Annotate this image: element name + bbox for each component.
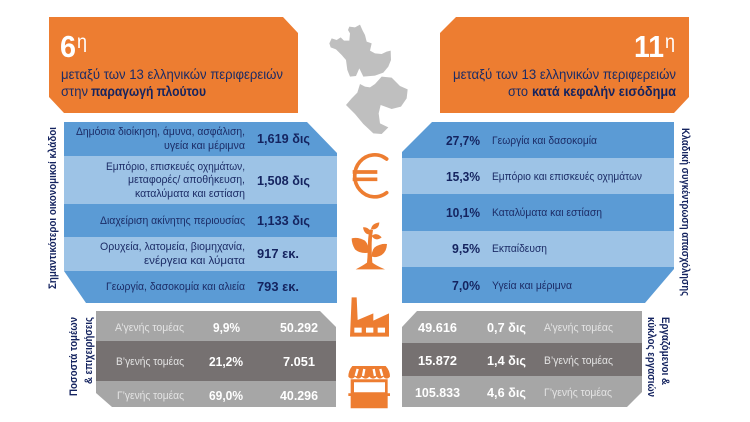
panel: wealth production rank (49, 17, 298, 113)
row: primary sector: 0,7 δις (487, 320, 526, 335)
row: education share: Εκπαίδευση (492, 243, 547, 255)
label: employees and turnover (645, 317, 671, 397)
row: tertiary sector (117, 388, 318, 403)
description emphasis: κατά κεφαλήν εισόδημα (532, 84, 677, 99)
row: accommodation share: Καταλύματα και εστίαση (492, 207, 602, 219)
row: primary sector (418, 320, 613, 335)
row: primary sector: 9,9% (213, 320, 240, 335)
icon: euro (353, 155, 387, 197)
row: health share: 7,0% (452, 278, 480, 293)
rank suffix: η (77, 32, 87, 53)
row: secondary sector: 7.051 (283, 354, 315, 369)
map: region silhouette (329, 25, 408, 134)
row: tertiary sector: 4,6 δις (487, 385, 526, 400)
row: education share: 9,5% (452, 241, 480, 256)
row: trade and transport (106, 161, 310, 200)
label: main economic sectors: Σημαντικότεροι οικονομικοί κλάδοι (47, 127, 59, 289)
row: agriculture (106, 279, 299, 294)
row: trade share: Εμπόριο και επισκευές οχημάτων (492, 171, 642, 183)
row: trade and transport: καταλύματα και εστίαση (135, 188, 245, 200)
row: agriculture: 793 εκ. (257, 279, 299, 294)
label: employees and turnover: κύκλος εργασιών (645, 317, 657, 397)
row: tertiary sector: 69,0% (209, 388, 243, 403)
icon: factory (350, 297, 389, 337)
row: real estate (100, 213, 310, 228)
row: tertiary sector: 40.296 (280, 388, 318, 403)
row: primary sector: 50.292 (280, 320, 318, 335)
row: tertiary sector: Γ’γενής τομέας (117, 390, 184, 402)
description emphasis: παραγωγή πλούτου (91, 84, 206, 99)
row: secondary sector (418, 353, 613, 368)
description line 1: μεταξύ των 13 ελληνικών περιφερειών (61, 67, 283, 82)
row: secondary sector (116, 354, 315, 369)
row: primary sector: Α’γενής τομέας (544, 322, 613, 334)
row: accommodation share: 10,1% (446, 205, 480, 220)
label: employment concentration: Κλαδική συγκέντρωση απασχόλησης (679, 128, 691, 296)
row: primary sector (115, 320, 318, 335)
panel: sector and business shares table (96, 311, 336, 407)
panel: main economic sectors table (64, 122, 337, 303)
row: public administration (76, 126, 310, 152)
row: education share (452, 241, 547, 256)
row: trade and transport: Εμπόριο, επισκευές οχημάτων, (106, 161, 245, 173)
row: public administration: Δημόσια διοίκηση, άμυνα, ασφάλιση, (76, 126, 245, 138)
panel: employees and turnover table (402, 311, 642, 407)
row: agriculture share (446, 133, 598, 148)
row: secondary sector: 1,4 δις (487, 353, 526, 368)
row: health share: Υγεία και μέριμνα (492, 280, 573, 292)
row: mining and industry: 917 εκ. (257, 246, 299, 261)
rank suffix: η (665, 32, 675, 53)
row: agriculture: Γεωργία, δασοκομία και αλιεία (106, 281, 246, 293)
row: tertiary sector: Γ’γενής τομέας (544, 387, 612, 399)
description line 1: μεταξύ των 13 ελληνικών περιφερειών (453, 67, 676, 82)
label: sector and business shares: & επιχειρήσεις (83, 317, 95, 384)
row: mining and industry (100, 241, 299, 267)
row: mining and industry: Ορυχεία, λατομεία, βιομηχανία, (100, 241, 245, 253)
description line 2: στην (61, 84, 88, 99)
row: tertiary sector (415, 385, 612, 400)
label: employees and turnover: Εργαζόμενοι & (659, 317, 671, 385)
row: agriculture share: Γεωργία και δασοκομία (492, 135, 598, 147)
row: accommodation share (446, 205, 602, 220)
row: mining and industry: ενέργεια και λύματα (144, 255, 246, 267)
icon: plant sprout (352, 222, 387, 269)
row: trade share: 15,3% (446, 169, 480, 184)
row: public administration: υγεία και μέριμνα (164, 140, 246, 152)
row: agriculture share: 27,7% (446, 133, 480, 148)
row: trade and transport: 1,508 δις (257, 173, 310, 188)
row: trade and transport: μεταφορές/ αποθήκευση, (128, 174, 245, 186)
row: real estate: 1,133 δις (257, 213, 310, 228)
label: sector and business shares: Ποσοστά τομέων (68, 317, 80, 396)
row: real estate: Διαχείριση ακίνητης περιουσίας (100, 215, 245, 227)
panel: per-capita income rank (440, 17, 689, 113)
description line 2: στο (508, 84, 528, 99)
row: tertiary sector: 105.833 (415, 385, 460, 400)
rank number 11th: 11 (634, 29, 664, 64)
label: sector and business shares (68, 317, 95, 396)
row: secondary sector: Β’γενής τομέας (544, 355, 613, 367)
row: health share (452, 278, 573, 293)
row: primary sector: 49.616 (418, 320, 457, 335)
row: secondary sector: 21,2% (209, 354, 243, 369)
icon: market stall (348, 366, 390, 408)
row: secondary sector: Β’γενής τομέας (116, 356, 184, 368)
row: primary sector: Α’γενής τομέας (115, 322, 184, 334)
row: public administration: 1,619 δις (257, 131, 310, 146)
panel: employment concentration table (402, 122, 674, 303)
rank number 6th: 6 (60, 29, 76, 64)
row: secondary sector: 15.872 (418, 353, 457, 368)
row: trade share (446, 169, 642, 184)
